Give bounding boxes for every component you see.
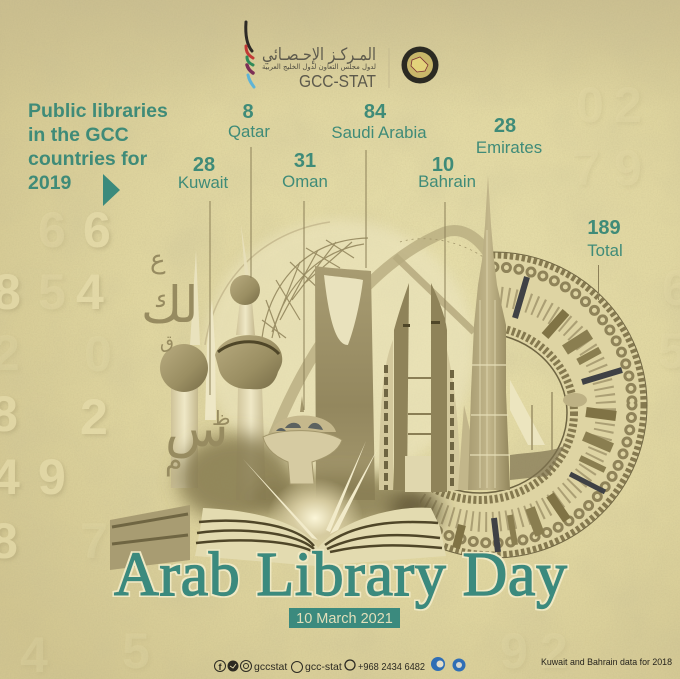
footer social contacts: gccstat <box>254 661 287 673</box>
footer social contacts: gcc-stat <box>305 661 342 673</box>
Arabic calligraphy motifs: لك <box>141 276 198 334</box>
faint embossed numerals: 5 <box>122 623 150 679</box>
logo: GCC-STAT: المـركـز الإحـصـائي <box>262 45 376 65</box>
faint embossed numerals: 9 <box>614 140 642 196</box>
faint embossed numerals: 9 <box>500 623 528 679</box>
heading: public libraries: countries for <box>28 148 148 170</box>
stat: Bahrain: 10 <box>432 154 454 176</box>
faint embossed numerals: 2 <box>80 389 108 445</box>
footer social contacts <box>214 657 466 673</box>
icon: secondary partner logo <box>452 658 466 672</box>
GCC emblem <box>402 46 438 84</box>
faint embossed numerals: 4 <box>76 264 104 320</box>
logo: GCC-STAT: لدول مجلس التعاون لدول الخليج العربية <box>262 63 376 71</box>
stat: Kuwait: 28 <box>193 154 215 176</box>
stat: Oman: Oman <box>282 172 328 191</box>
faint embossed numerals: 6 <box>83 202 111 258</box>
heading: public libraries: in the GCC <box>28 124 129 146</box>
date badge <box>289 608 400 628</box>
logo: GCC-STAT <box>246 22 438 91</box>
stat: Qatar <box>228 101 270 141</box>
Bahrain World Trade Centre <box>379 283 484 492</box>
icon: instagram <box>240 660 252 672</box>
left sail tower <box>379 283 409 490</box>
stat: Bahrain <box>418 154 476 191</box>
faint embossed numerals: 5 <box>38 264 66 320</box>
Arabic calligraphy motifs <box>141 245 230 477</box>
arches and lattice roof <box>205 222 512 445</box>
stat: Total: Total <box>587 241 623 260</box>
stat: Saudi Arabia: Saudi Arabia <box>331 123 427 142</box>
stat: Oman <box>282 150 328 191</box>
open book with light <box>195 441 446 566</box>
faint embossed numerals: 0 <box>576 77 604 133</box>
Burj Khalifa <box>468 175 510 490</box>
Oman dome monument <box>263 396 342 484</box>
Kingdom Centre tower <box>315 266 375 500</box>
logo ribbon stripes <box>246 22 254 87</box>
icon: facebook <box>214 660 226 672</box>
stat: Saudi Arabia <box>331 101 427 142</box>
leader lines <box>210 147 598 410</box>
Arabic calligraphy motifs: س <box>165 399 228 459</box>
faint embossed numerals: 7 <box>80 513 108 569</box>
logo: GCC-STAT: GCC-STAT <box>299 71 376 91</box>
faint embossed numerals: 0 <box>84 326 112 382</box>
ornamental calligraphy ring <box>420 252 648 558</box>
stat: Emirates: 28 <box>494 115 516 137</box>
faint embossed numerals: 6 <box>38 202 66 258</box>
smoke behind the book <box>177 434 441 536</box>
Arabic calligraphy motifs: م <box>165 444 182 477</box>
heading: public libraries: Public libraries <box>28 100 168 122</box>
stat: Qatar: 8 <box>242 101 254 123</box>
icon: twitter <box>228 660 238 672</box>
stat: Total: 189 <box>587 217 621 239</box>
stat: Emirates: Emirates <box>476 138 542 157</box>
Arabic calligraphy motifs: ق <box>160 332 174 353</box>
heading: public libraries: 2019 <box>28 172 72 194</box>
stat: Bahrain: Bahrain <box>418 172 476 191</box>
distant harbour inside ring <box>510 380 565 480</box>
arrow <box>103 174 120 206</box>
stat: Qatar: Qatar <box>228 122 270 141</box>
footnote: Kuwait and Bahrain data for 2018 <box>541 657 672 668</box>
stat: Oman: 31 <box>294 150 316 172</box>
main Kuwait tower <box>215 225 282 500</box>
left Kuwait tower <box>160 250 216 488</box>
faint embossed numerals: 2 <box>614 77 642 133</box>
stat: Saudi Arabia: 84 <box>364 101 387 123</box>
footer social contacts: +968 2434 6482 <box>358 661 425 673</box>
icon: snapchat <box>292 662 302 672</box>
icon: blue partner logo <box>431 657 445 671</box>
skyline backdrop glow <box>205 220 475 480</box>
stat: Kuwait: Kuwait <box>178 173 229 192</box>
faint embossed numerals: 7 <box>572 140 600 196</box>
stack of old books <box>110 505 190 570</box>
stat: Total <box>587 217 623 260</box>
faint embossed numerals: 9 <box>38 449 66 505</box>
Arabic calligraphy motifs: ظ <box>212 406 230 430</box>
stat: Emirates <box>476 115 542 157</box>
date badge: 10 March 2021 <box>296 611 393 627</box>
Arabic calligraphy motifs: ع <box>150 245 166 275</box>
icon: facebook: f <box>218 662 222 672</box>
right sail tower <box>431 283 460 492</box>
title: Arab Library Day <box>114 541 567 609</box>
faint embossed numerals: 2 <box>540 623 568 679</box>
stat: Kuwait <box>178 154 229 192</box>
icon: whatsapp <box>345 660 355 670</box>
